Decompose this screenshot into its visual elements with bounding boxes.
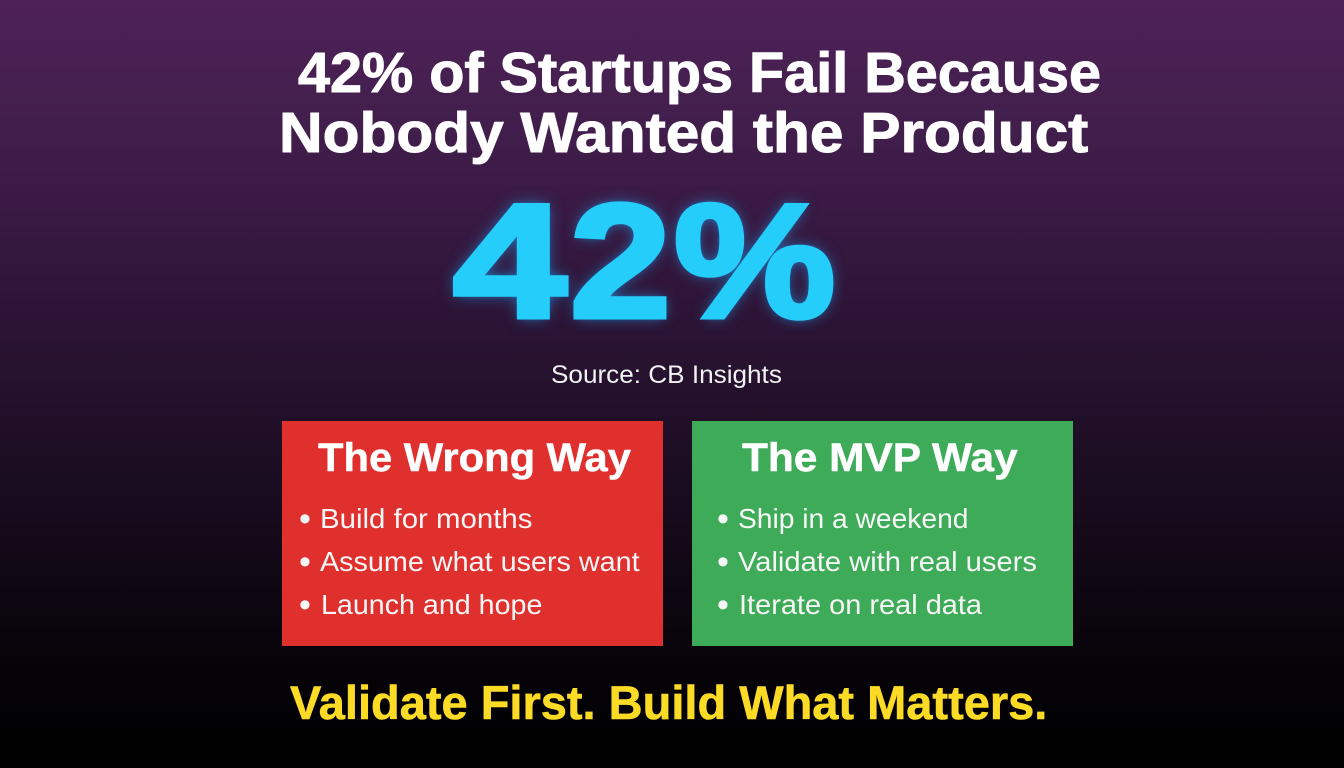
bullet list: Iterate on real data xyxy=(739,589,982,620)
bullet list xyxy=(717,500,1036,624)
title line 1: 42% of Startups Fail Because xyxy=(298,41,1101,105)
bullet list: • xyxy=(717,500,729,538)
bullet list: • xyxy=(299,586,311,624)
bullet list xyxy=(299,500,640,624)
tagline: Validate First. Build What Matters. xyxy=(290,676,1047,729)
bullet list: • xyxy=(299,500,311,538)
panel heading: The Wrong Way xyxy=(318,436,631,480)
bullet list: • xyxy=(299,543,311,581)
source note: Source: CB Insights xyxy=(551,361,782,389)
bullet list: Validate with real users xyxy=(738,546,1036,577)
bullet list: Ship in a weekend xyxy=(738,503,968,534)
big stat 42%: % xyxy=(674,171,835,352)
bullet list: Assume what users want xyxy=(320,546,639,577)
bullet list: Build for months xyxy=(320,503,532,534)
title xyxy=(279,41,1101,165)
panel heading: The MVP Way xyxy=(742,436,1018,480)
bullet list: Launch and hope xyxy=(321,589,542,620)
panel: the mvp way xyxy=(692,421,1073,646)
bullet list: • xyxy=(717,586,729,624)
big stat 42% xyxy=(445,171,841,352)
title line 2: Nobody Wanted the Product xyxy=(279,101,1088,165)
big stat 42%: 4 xyxy=(453,171,567,352)
panel: the wrong way xyxy=(282,421,663,646)
bullet list: • xyxy=(717,543,729,581)
big stat 42%: 2 xyxy=(570,171,671,352)
